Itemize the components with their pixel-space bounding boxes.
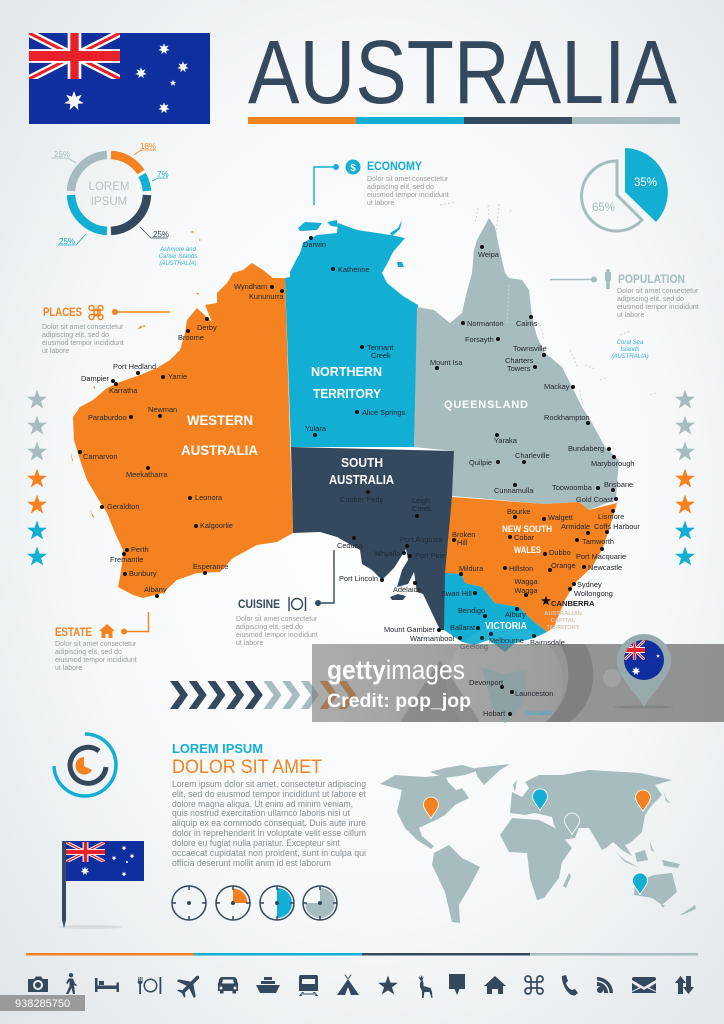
island labels: Cartier Islands xyxy=(159,254,197,260)
icon: tent xyxy=(337,974,359,995)
city labels: Mount Isa xyxy=(430,358,463,367)
callout: estate xyxy=(55,612,148,672)
callout: places: ut labore xyxy=(42,348,69,355)
Australian Capital Territory label xyxy=(544,611,582,631)
text block: dolore magna aliqua. Ut enim ad minim veniam, xyxy=(172,799,353,809)
icon: house xyxy=(484,976,506,994)
city labels: Ballarat xyxy=(450,623,475,632)
city labels: Broome xyxy=(178,333,204,342)
city labels: Albury xyxy=(505,610,526,619)
city labels: Creek xyxy=(371,351,391,360)
icon: phone xyxy=(562,975,578,996)
image id badge: 938285750 xyxy=(15,998,70,1010)
Australian Capital Territory label: CAPITAL xyxy=(551,618,576,624)
region labels xyxy=(181,364,552,632)
donut chart: LOREM xyxy=(89,181,129,193)
region labels: AUSTRALIA xyxy=(181,442,258,458)
region labels: QUEENSLAND xyxy=(444,399,529,411)
island labels: Islands xyxy=(620,347,640,353)
callout: cuisine xyxy=(236,550,334,647)
callout: population: Dolor sit amet consectetur xyxy=(617,288,699,295)
island labels: (AUSTRALIA) xyxy=(611,354,649,360)
city labels: Normanton xyxy=(467,319,504,328)
title colour bar xyxy=(248,117,680,124)
callout: population xyxy=(550,269,699,319)
Queensland xyxy=(414,218,619,510)
callout: estate: ESTATE xyxy=(55,627,92,639)
city labels: Port Pirie xyxy=(415,551,445,560)
callout: places: eiusmod tempor incididunt xyxy=(42,340,124,347)
text block: officia deserunt mollit anim id est laborum xyxy=(172,858,331,868)
callout: places xyxy=(42,306,170,355)
callout: cuisine: adipiscing elit, sed do xyxy=(236,624,303,631)
region labels: TERRITORY xyxy=(313,386,381,401)
text block: LOREM IPSUM xyxy=(172,741,263,756)
world map xyxy=(380,764,696,923)
capital: Canberra: CANBERRA xyxy=(551,599,595,608)
text block: dolore eu fugiat nulla pariatur. Excepteur sint xyxy=(172,838,341,848)
callout: estate: ut labore xyxy=(55,665,82,672)
city labels: Kalgoorlie xyxy=(200,521,233,530)
city labels: Lismore xyxy=(598,512,624,521)
city labels: Mildura xyxy=(459,564,484,573)
city labels: Maryborough xyxy=(591,459,635,468)
region labels: VICTORIA xyxy=(485,620,527,632)
city labels: Alice Springs xyxy=(362,408,405,417)
city labels: Coober Pedy xyxy=(340,495,383,504)
watermark band: Credit: pop_jop xyxy=(327,690,471,712)
callout: places: adipiscing elit, sed do xyxy=(42,332,109,339)
Western coast islands xyxy=(71,231,201,518)
city labels: Townsville xyxy=(513,344,547,353)
city labels: Cairns xyxy=(516,319,538,328)
text block: Lorem ipsum dolor sit amet, consectetur adipiscing xyxy=(172,779,366,789)
city labels: Bunbury xyxy=(129,569,157,578)
city labels: Melbourne xyxy=(489,636,524,645)
pie chart xyxy=(582,148,668,231)
Tasmania city labels: Hobart xyxy=(483,709,505,718)
city labels: Geelong xyxy=(460,642,488,651)
callout: places: Dolor sit amet consectetur xyxy=(42,324,124,331)
donut chart: IPSUM xyxy=(91,196,127,208)
city labels: Coffs Harbour xyxy=(594,522,640,531)
region labels: NEW SOUTH xyxy=(502,524,552,535)
city labels: Swan Hill xyxy=(441,589,472,598)
island labels: Coral Sea xyxy=(617,340,644,346)
city labels: Towers xyxy=(507,364,531,373)
island labels: Ashmore and xyxy=(159,247,197,253)
city labels: Weipa xyxy=(478,250,500,259)
city labels: Perth xyxy=(131,545,149,554)
icon: car xyxy=(218,977,238,994)
city labels: Geraldton xyxy=(107,502,139,511)
city labels: Quilpie xyxy=(469,458,492,467)
New South Wales xyxy=(445,497,617,632)
city labels: Yaraka xyxy=(494,436,518,445)
city labels: Whyalla xyxy=(374,549,401,558)
callout: cuisine: eiusmod tempor incididunt xyxy=(236,632,318,639)
icon: rss xyxy=(597,977,613,993)
callout: population: POPULATION xyxy=(618,274,685,286)
Northern Territory xyxy=(285,223,418,447)
image id badge xyxy=(0,995,85,1011)
chevron arrows xyxy=(170,681,356,709)
city labels: Toowoomba xyxy=(552,483,593,492)
icon: deer xyxy=(418,975,432,998)
callout: economy: $ xyxy=(350,163,356,174)
watermark band xyxy=(312,625,724,741)
bottom colour rule xyxy=(26,953,698,956)
pie chart: 65% xyxy=(592,202,615,214)
lower logo icon xyxy=(54,734,116,796)
city labels xyxy=(81,240,640,651)
city labels: Gold Coast xyxy=(576,495,613,504)
callout: estate: eiusmod tempor incididunt xyxy=(55,657,137,664)
city labels: Cunnamulla xyxy=(494,486,534,495)
city labels: Bourke xyxy=(507,507,530,516)
region labels: AUSTRALIA xyxy=(329,473,394,487)
city labels: Darwin xyxy=(303,240,326,249)
city labels: Bairnsdale xyxy=(530,638,565,647)
city labels: Mount Gambier xyxy=(384,625,435,634)
Northern Territory islands xyxy=(298,220,404,267)
Australian Capital Territory label: AUSTRALIAN xyxy=(544,611,582,617)
city labels: Bundaberg xyxy=(568,444,604,453)
callout: estate: Dolor sit amet consectetur xyxy=(55,641,137,648)
text block xyxy=(172,741,367,868)
clock icons xyxy=(172,886,337,920)
city labels: Creek xyxy=(412,504,432,513)
city labels: Forsayth xyxy=(465,335,494,344)
city labels: Cobar xyxy=(514,533,535,542)
Tasmania city labels xyxy=(469,678,553,718)
icon: speech pin xyxy=(449,974,465,995)
city labels: Esperance xyxy=(193,562,228,571)
Tasmania city labels: Devonport xyxy=(469,678,503,687)
left stars xyxy=(27,390,47,566)
Australian Capital Territory label: TERRITORY xyxy=(546,625,580,631)
city labels: Leonora xyxy=(195,493,223,502)
region labels: SOUTH xyxy=(341,456,383,470)
callout: economy: Dolor sit amet consectetur xyxy=(367,176,449,183)
city labels: Charleville xyxy=(515,451,550,460)
city labels: Tennant xyxy=(367,343,393,352)
city labels: Yarrie xyxy=(168,372,187,381)
island labels: (AUSTRALIA) xyxy=(159,261,197,267)
city labels: Wagga xyxy=(514,586,538,595)
city labels: Broken xyxy=(452,530,475,539)
watermark band: gettyimages xyxy=(327,655,465,685)
icon: plane xyxy=(172,968,207,1003)
city labels: Yulara xyxy=(305,424,327,433)
island labels xyxy=(159,247,649,360)
city dots xyxy=(78,236,618,640)
city labels: Warrnambool xyxy=(410,634,454,643)
region labels: WALES xyxy=(514,545,541,556)
icon: star xyxy=(378,976,398,994)
callout: economy: ECONOMY xyxy=(367,161,422,173)
city labels: Wyndham xyxy=(234,282,267,291)
callout: economy xyxy=(314,160,449,207)
region labels: NORTHERN xyxy=(311,364,382,379)
donut chart: 18% xyxy=(140,142,156,151)
city labels: Karratha xyxy=(109,386,138,395)
text block: quis nostrud exercitation ullamco laboris nisi ut xyxy=(172,808,351,818)
city labels: Newman xyxy=(148,405,177,414)
city labels: Leigh xyxy=(412,496,430,505)
South Australia xyxy=(291,447,454,630)
city labels: Hill xyxy=(457,538,468,547)
city labels: Newcastle xyxy=(588,563,622,572)
flag of Australia xyxy=(29,33,210,124)
city labels: Katherine xyxy=(338,265,370,274)
city labels: Dubbo xyxy=(549,548,571,557)
icon: bed xyxy=(95,978,119,992)
city labels: Albany xyxy=(144,585,167,594)
region labels: WESTERN xyxy=(187,412,253,428)
text block: DOLOR SIT AMET xyxy=(172,757,322,778)
callout: population: adipiscing elit, sed do xyxy=(617,296,684,303)
icon: fork and plate xyxy=(138,977,161,994)
callout: cuisine: ut labore xyxy=(236,640,263,647)
callout: economy: adipiscing elit, sed do xyxy=(367,184,434,191)
callout: population: ut labore xyxy=(617,312,644,319)
icon: mail xyxy=(632,977,656,993)
city labels: Port Lincoln xyxy=(339,574,378,583)
map of Australia xyxy=(71,202,656,652)
icon row xyxy=(28,968,694,1003)
city labels: Port Augusta xyxy=(400,535,443,544)
city labels: Sydney xyxy=(577,580,602,589)
callout: cuisine: CUISINE xyxy=(238,599,280,611)
city labels: Port Hedland xyxy=(113,362,156,371)
donut chart: 25% xyxy=(54,150,70,159)
city labels: Carnarvon xyxy=(83,452,118,461)
city labels: Walgett xyxy=(548,513,573,522)
city labels: Hillston xyxy=(509,564,533,573)
location pin with flag xyxy=(614,634,674,708)
city labels: Tamworth xyxy=(582,537,614,546)
city labels: Rockhampton xyxy=(544,413,590,422)
pie chart: 35% xyxy=(634,177,657,189)
city labels: Ceduna xyxy=(337,541,364,550)
donut chart: 7% xyxy=(157,170,169,179)
callout: population: eiusmod tempor incididunt xyxy=(617,304,699,311)
right stars xyxy=(675,390,695,566)
city labels: Brisbane xyxy=(604,480,633,489)
icon: camera xyxy=(28,976,48,992)
text block: dolor in reprehenderit in voluptate velit esse cillum xyxy=(172,828,366,838)
icon: ship xyxy=(256,977,280,993)
city labels: Mackay xyxy=(544,382,570,391)
icon: command xyxy=(525,976,543,994)
Tasmania xyxy=(482,667,552,723)
callout: economy: eiusmod tempor incididunt xyxy=(367,192,449,199)
city labels: Paraburdoo xyxy=(88,413,127,422)
city labels: Charters xyxy=(505,356,534,365)
capital: Canberra xyxy=(541,596,595,608)
flag on pole xyxy=(58,841,144,929)
city labels: Adelaide xyxy=(393,585,422,594)
callout: economy: ut labore xyxy=(367,200,394,207)
world map pins xyxy=(424,789,650,894)
donut chart: 25% xyxy=(153,230,169,239)
donut chart: 25% xyxy=(59,237,75,246)
city labels: Fremantle xyxy=(110,555,143,564)
Queensland coast specks xyxy=(440,202,656,406)
city labels: Bendigo xyxy=(458,606,485,615)
city labels: Orange xyxy=(551,561,576,570)
icon: walker xyxy=(66,973,77,994)
city labels: Wollongong xyxy=(574,589,613,598)
Kangaroo Island xyxy=(390,594,406,600)
icon: arrows xyxy=(675,976,694,994)
Tasmania city labels: Launceston xyxy=(515,689,553,698)
callout: estate: adipiscing elit, sed do xyxy=(55,649,122,656)
city labels: Wagga xyxy=(514,577,538,586)
callout: cuisine: Dolor sit amet consectetur xyxy=(236,616,318,623)
city labels: Port Macquarie xyxy=(576,552,626,561)
callout: places: PLACES xyxy=(43,307,82,319)
city labels: Armidale xyxy=(561,522,590,531)
icon: train xyxy=(299,975,318,996)
donut chart xyxy=(52,142,169,246)
text block: aliquip ex ea commodo consequat. Duis aute irure xyxy=(172,818,366,828)
city labels: Meekatharra xyxy=(126,470,168,479)
city labels: Dampier xyxy=(81,374,109,383)
text block: occaecat cupidatat non proident, sunt in culpa qui xyxy=(172,848,366,858)
text block: elit, sed do eiusmod tempor incididunt ut labore et xyxy=(172,789,367,799)
Victoria xyxy=(444,573,547,652)
Tasmania label: Tasmania xyxy=(524,710,552,717)
city labels: Derby xyxy=(197,323,217,332)
city labels: Kununurra xyxy=(249,292,284,301)
Western Australia xyxy=(73,263,293,598)
